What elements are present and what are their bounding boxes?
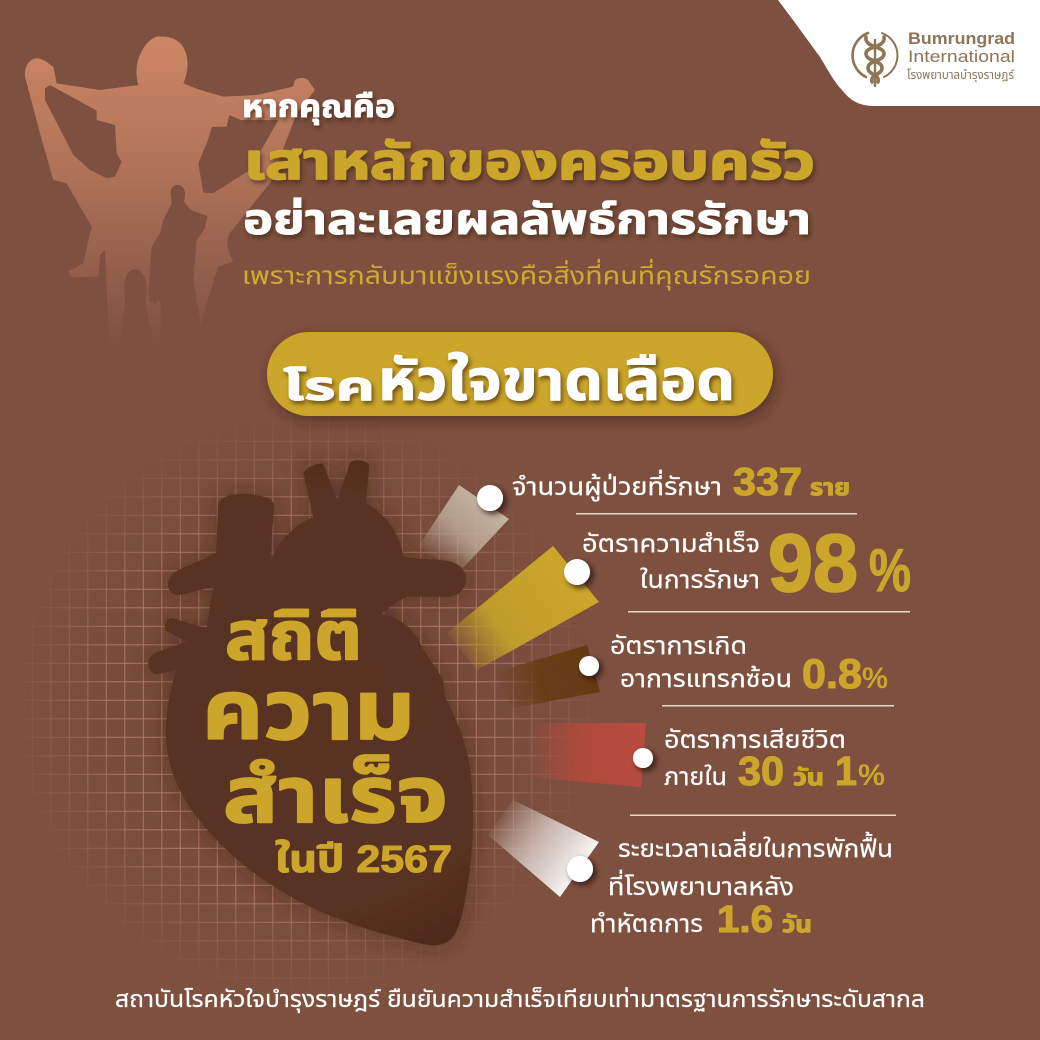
adult carrying child <box>25 36 315 355</box>
stat 5: average recovery: ทำหัตถการ <box>590 910 703 938</box>
stat 4: 30-day mortality: 1 <box>835 748 857 794</box>
banner pill <box>267 332 773 416</box>
logo <box>853 29 1015 86</box>
heading block <box>242 89 815 291</box>
heart <box>148 460 473 945</box>
heart text: สำเร็จ: สำเร็จ <box>223 751 448 839</box>
footer note: สถาบันโรคหัวใจบำรุงราษฎร์ ยืนยันความสำเร็จเทียบเท่ามาตรฐานการรักษาระดับสากล <box>115 986 925 1013</box>
dot 2 <box>564 559 590 585</box>
title line 2: เสาหลักของครอบครัว <box>244 133 815 190</box>
stat 2: success rate <box>564 518 911 609</box>
beam 3 <box>493 645 600 708</box>
small silhouette: girl <box>118 269 157 355</box>
subtitle: เพราะการกลับมาแข็งแรงคือสิ่งที่คนที่คุณรักรอคอย <box>242 258 811 291</box>
stat 4: 30-day mortality: ภายใน <box>664 763 727 791</box>
beam 4 <box>527 723 646 787</box>
banner text: โรค <box>283 365 375 409</box>
stat 4 label: อัตราการเสียชีวิต <box>664 726 846 754</box>
icon: caduceus emblem <box>853 33 897 86</box>
heart text: ในปี 2567: ในปี 2567 <box>275 839 452 881</box>
stat 5: average recovery: ที่โรงพยาบาลหลัง <box>608 869 794 901</box>
gap under child's left arm <box>45 85 122 178</box>
stat 5 label: ระยะเวลาเฉลี่ยในการพักฟื้น <box>618 831 893 863</box>
stat 2 label: อัตราความสำเร็จ <box>582 530 760 558</box>
beam 2 <box>447 546 599 670</box>
dot 5 <box>567 856 593 882</box>
dot 1 <box>477 485 503 511</box>
logo: โรงพยาบาลบำรุงราษฎร์ <box>907 68 1015 82</box>
heart text: สถิติ: สถิติ <box>225 598 362 674</box>
dot 3 <box>579 656 599 676</box>
heart text: ความ: ความ <box>202 664 415 757</box>
small silhouette: father and child <box>148 185 207 355</box>
stat 2: success rate: % <box>869 537 911 604</box>
stat 1 value: 337 <box>733 461 802 504</box>
banner text: หัวใจขาดเลือด <box>378 349 735 413</box>
logo: International <box>908 47 1015 66</box>
logo corner panel <box>778 0 1040 106</box>
title line 3: อย่าละเลยผลลัพธ์การรักษา <box>243 196 811 244</box>
stat 3 label: อัตราการเกิด <box>610 632 747 660</box>
stat 5 value: 1.6 <box>717 899 773 941</box>
beam 1 <box>416 485 509 568</box>
stat 3: complication rate: % <box>862 662 888 695</box>
stat 2: success rate: ในการรักษา <box>640 566 760 594</box>
stat 1 label: จำนวนผู้ป่วยที่รักษา <box>512 469 722 502</box>
stat 5: average recovery: วัน <box>782 911 812 937</box>
silhouette: family <box>25 36 315 355</box>
stat 4: 30-day mortality: % <box>858 759 885 792</box>
stat 1: patients treated <box>477 461 850 511</box>
dot 4 <box>633 748 653 768</box>
beam 5 <box>488 800 599 897</box>
title line 1: หากคุณคือ <box>242 89 395 125</box>
stat 1 unit: ราย <box>810 474 850 500</box>
light beams <box>416 485 646 897</box>
logo wordmark: Bumrungrad <box>908 29 1015 48</box>
stat 4: 30-day mortality: วัน <box>793 764 824 790</box>
stat 4 value: 30 <box>738 748 784 794</box>
stat 5: average recovery <box>567 831 893 941</box>
stat 3: complication rate: อาการแทรกซ้อน <box>620 665 792 693</box>
stat 2 value: 98 <box>768 518 858 609</box>
stat 4: 30-day mortality <box>633 726 885 794</box>
stat 3: complication rate <box>579 632 888 697</box>
gap under child's right arm <box>198 115 278 193</box>
heart shape <box>148 460 473 945</box>
grid backdrop <box>28 429 580 982</box>
stat 3 value: 0.8 <box>802 650 862 697</box>
